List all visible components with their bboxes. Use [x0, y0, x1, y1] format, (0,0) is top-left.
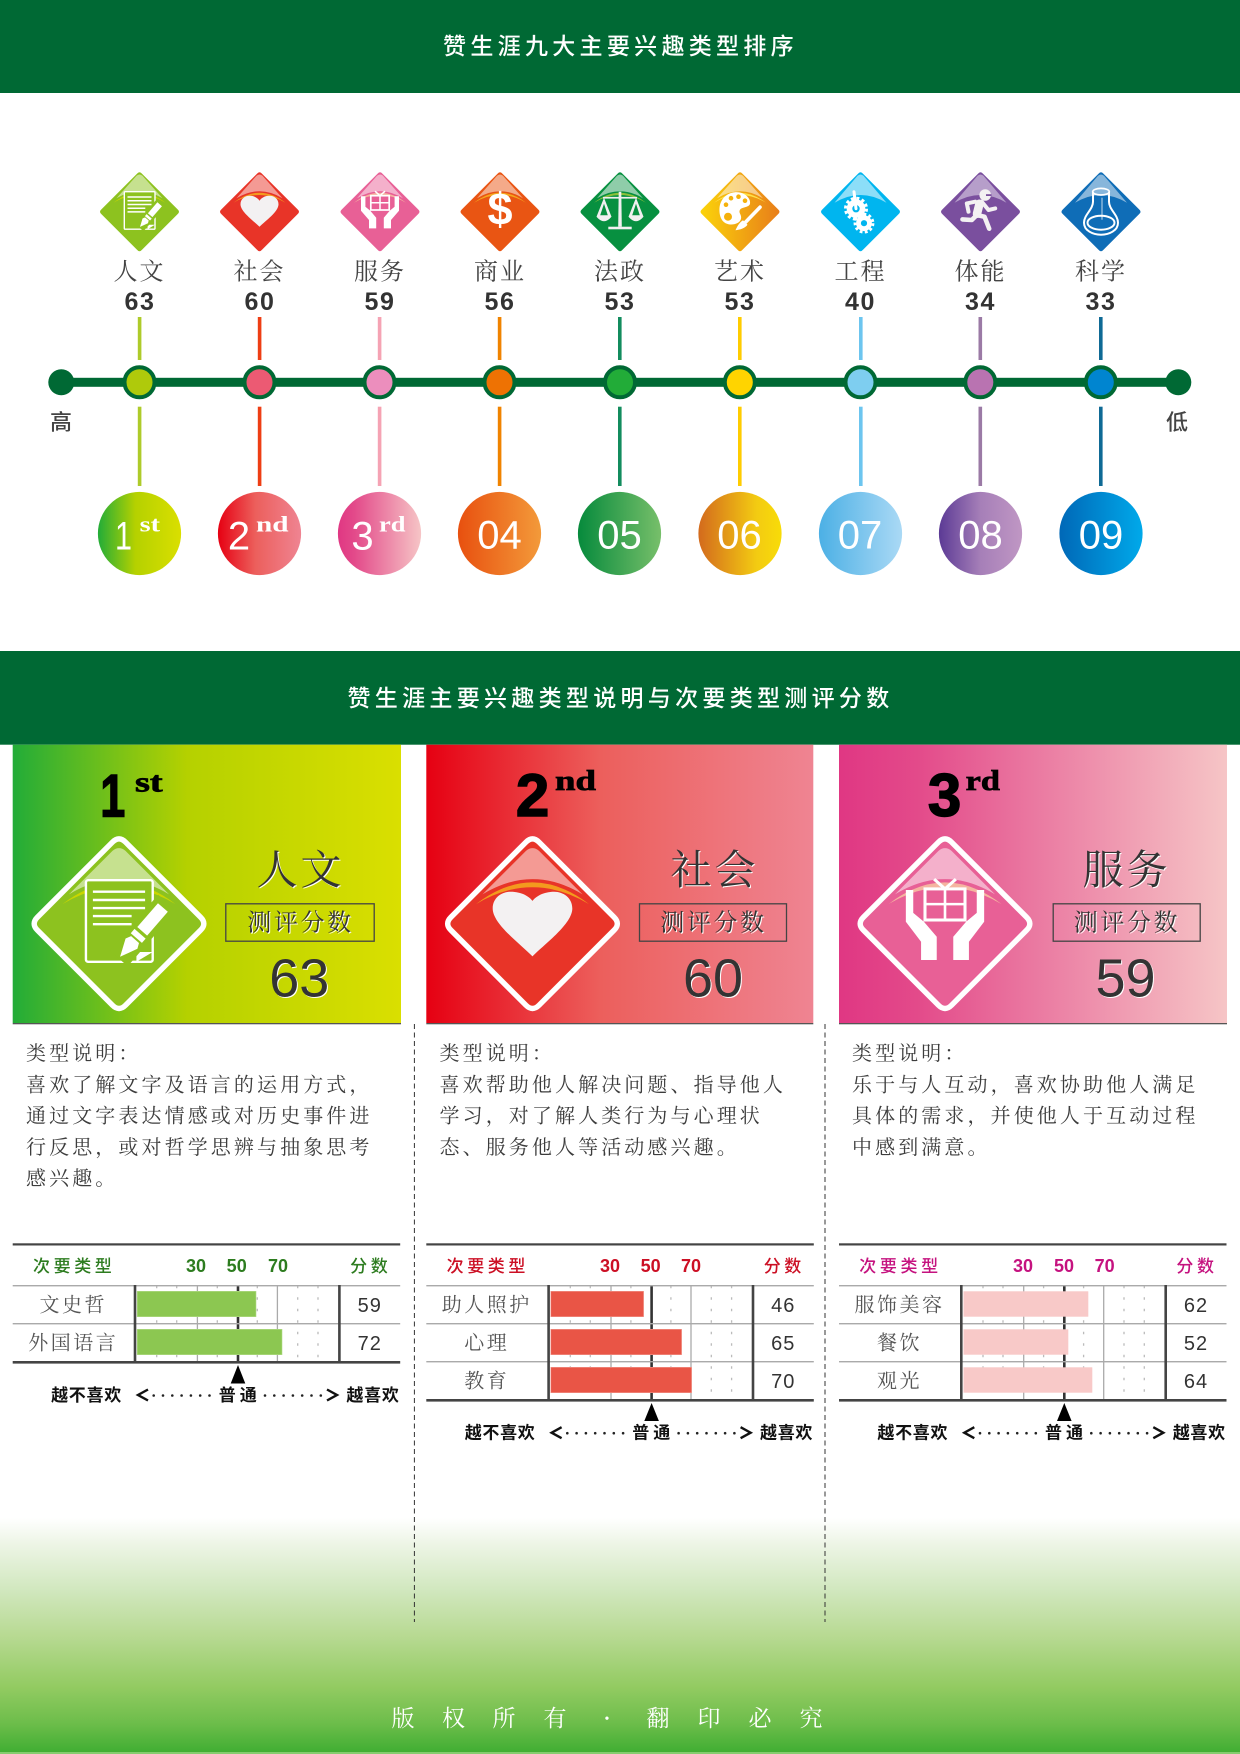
preference legend: 越不喜欢: [877, 1423, 948, 1443]
score label box: 测评分数: [660, 910, 767, 936]
rank number: 1: [100, 762, 125, 830]
card banner: [839, 745, 1227, 1024]
preference legend: [877, 1423, 1226, 1443]
type description: [26, 1042, 372, 1190]
score value: 60: [683, 948, 743, 1008]
connector lines: [738, 317, 742, 486]
type description: 学习，对了解人类行为与心理状: [440, 1105, 763, 1128]
bar: 外国语言 72: [28, 1329, 382, 1355]
rank badge: [458, 492, 541, 575]
footer gradient band: [0, 1518, 1240, 1754]
connector lines: [378, 317, 381, 486]
table header: 70: [1095, 1256, 1115, 1276]
category name: 工程: [834, 258, 886, 286]
type description: [852, 1042, 1198, 1159]
table header: [859, 1256, 1218, 1276]
footer copyright: 究: [800, 1706, 822, 1731]
icon: runner: [941, 172, 1020, 251]
secondary type chart: [426, 1243, 814, 1443]
type description: [440, 1042, 786, 1159]
timeline axis: [48, 369, 1191, 435]
timeline axis: 低: [1166, 410, 1188, 435]
table header: 分数: [1176, 1257, 1218, 1276]
bar: 外国语言 72: 外国语言: [28, 1332, 118, 1354]
rank number: [100, 762, 164, 830]
connector lines: [498, 317, 501, 486]
bar: 服饰美容 62: 服饰美容: [854, 1294, 944, 1316]
rank badge: 08: [958, 514, 1003, 558]
rank number: st: [135, 768, 164, 798]
score: 53: [604, 288, 636, 316]
icon: dollar: [460, 172, 540, 251]
footer copyright: 所: [492, 1706, 516, 1731]
icon: palette and brush: [700, 172, 780, 251]
secondary type chart: [13, 1243, 400, 1405]
table header: 次要类型: [447, 1257, 529, 1276]
score value: 59: [1095, 948, 1156, 1008]
marker triangle: [1057, 1403, 1072, 1421]
score: 33: [1085, 288, 1117, 316]
score label box: [1053, 904, 1200, 941]
icon: flask: [1062, 172, 1140, 251]
header bar: description: [0, 651, 1240, 745]
rank badge: [98, 492, 181, 575]
rank badge: [218, 492, 301, 575]
score: 53: [724, 288, 756, 316]
table header: 70: [681, 1256, 701, 1276]
preference legend: 越喜欢: [1173, 1423, 1226, 1443]
category name: 体能: [954, 258, 1006, 286]
column 2: 社会: [218, 172, 301, 575]
connector lines: [618, 317, 622, 486]
type name: 人文: [256, 847, 344, 893]
preference legend: 普通: [219, 1385, 261, 1405]
table header: 分数: [764, 1257, 805, 1276]
large icon: heart: [448, 839, 617, 1009]
icon: dollar: $: [487, 184, 513, 235]
icon: document and pen: [100, 172, 179, 251]
type description: 行反思，或对哲学思辨与抽象思考: [26, 1136, 372, 1159]
preference legend: 越喜欢: [760, 1423, 813, 1443]
column 9: 科学: [1059, 172, 1143, 575]
header bar: ranking: [0, 0, 1240, 93]
table header: 次要类型: [33, 1257, 115, 1276]
panel: rank 2 社会: [426, 745, 814, 1443]
card banner: [426, 745, 813, 1024]
bar: 文史哲 59: 文史哲: [39, 1294, 107, 1316]
panel: rank 1 人文: [13, 745, 401, 1405]
rank number: 3: [928, 762, 961, 829]
large icon: document and pen: [34, 839, 204, 1009]
rank number: nd: [555, 766, 597, 797]
column 1: 人文: [98, 172, 181, 575]
bar: 教育 70: [464, 1367, 795, 1393]
connector lines: [258, 317, 261, 486]
rank badge: 2: [228, 514, 250, 558]
score label box: 测评分数: [1074, 910, 1180, 936]
preference legend: 普通: [632, 1423, 674, 1443]
preference legend: [51, 1385, 400, 1405]
table header: 30: [186, 1256, 206, 1276]
rank badge: 07: [838, 514, 882, 558]
score: 60: [244, 288, 276, 316]
score label box: 测评分数: [247, 910, 354, 936]
rank badge: 3: [351, 514, 374, 558]
large icon: hands holding gift: [860, 839, 1030, 1009]
score: 56: [484, 288, 516, 316]
rank badge: [819, 492, 902, 575]
bar: 服饰美容 62: [854, 1291, 1208, 1317]
icon: scales: [580, 172, 660, 251]
type description: 乐于与人互动，喜欢协助他人满足: [852, 1073, 1198, 1096]
bar: 观光 64: 64: [1184, 1371, 1208, 1393]
category name: 服务: [354, 258, 406, 286]
score: 59: [364, 288, 396, 316]
bar: 心理 65: 心理: [464, 1332, 509, 1354]
rank badge: [698, 492, 782, 575]
rank badge: 04: [477, 514, 522, 558]
footer copyright: 有: [544, 1706, 566, 1731]
header bar: description: 赞生涯主要兴趣类型说明与次要类型测评分数: [348, 685, 894, 711]
category name: 社会: [234, 258, 286, 286]
connector lines: [978, 317, 982, 486]
type description: 通过文字表达情感或对历史事件进: [26, 1105, 372, 1128]
bar: 餐饮 52: 餐饮: [877, 1332, 922, 1354]
type description: 具体的需求，并使他人于互动过程: [852, 1105, 1198, 1128]
table header: [447, 1256, 805, 1276]
score: 63: [124, 288, 156, 316]
rank badge: 05: [597, 514, 642, 558]
icon: heart: [220, 172, 299, 251]
type description: 喜欢帮助他人解决问题、指导他人: [440, 1073, 786, 1096]
bar: 文史哲 59: 59: [358, 1295, 382, 1317]
type name: 服务: [1082, 847, 1170, 893]
dashed divider left: [413, 1024, 415, 1622]
timeline node: [484, 367, 514, 397]
rank badge: [578, 492, 661, 575]
bar: 教育 70: 教育: [464, 1370, 509, 1392]
bar: 助人照护 46: 46: [771, 1295, 795, 1317]
category name: 法政: [594, 258, 646, 286]
type description: 类型说明：: [26, 1042, 142, 1065]
preference legend: 越不喜欢: [51, 1385, 122, 1405]
category name: 科学: [1075, 258, 1127, 286]
column 5: 法政: [578, 172, 661, 575]
bar: 观光 64: 观光: [877, 1370, 922, 1392]
footer copyright: 印: [698, 1706, 720, 1731]
category name: 商业: [474, 258, 526, 286]
score label box: [226, 904, 374, 941]
timeline node: [364, 367, 394, 397]
score label box: [640, 904, 786, 941]
type description: 类型说明：: [440, 1042, 555, 1065]
preference legend: [465, 1423, 813, 1443]
score: 34: [965, 288, 996, 316]
rank number: [928, 762, 1001, 829]
type name: 社会: [670, 847, 758, 893]
timeline node: [965, 367, 995, 397]
table header: 次要类型: [859, 1257, 942, 1276]
table header: 50: [227, 1256, 247, 1276]
timeline node: [605, 367, 635, 397]
table header: 50: [641, 1256, 661, 1276]
bar: 服饰美容 62: 62: [1184, 1295, 1208, 1317]
rank badge: 09: [1079, 514, 1123, 558]
bar: 餐饮 52: [877, 1329, 1208, 1355]
rank badge: 06: [717, 514, 762, 558]
rank number: rd: [966, 766, 1001, 797]
timeline node: [725, 367, 755, 397]
bar: 教育 70: 70: [771, 1371, 795, 1393]
table header: 30: [600, 1256, 620, 1276]
type description: 感兴趣。: [26, 1167, 118, 1190]
rank badge: [338, 492, 421, 575]
card banner: [13, 745, 401, 1024]
bar: 外国语言 72: 72: [358, 1333, 382, 1355]
footer copyright: [392, 1706, 822, 1731]
type description: 中感到满意。: [852, 1136, 991, 1159]
rank badge: nd: [256, 512, 289, 536]
table header: 70: [268, 1256, 288, 1276]
dashed divider right: [824, 1024, 826, 1622]
footer copyright: 必: [748, 1706, 772, 1731]
column 8: 体能: [939, 172, 1022, 575]
bar: 观光 64: [877, 1367, 1208, 1393]
icon: hands holding gift: [340, 172, 420, 251]
preference legend: 普通: [1045, 1423, 1087, 1443]
bar: 文史哲 59: [39, 1291, 382, 1317]
header bar: ranking: 赞生涯九大主要兴趣类型排序: [443, 33, 798, 59]
column 6: 艺术: [698, 172, 782, 575]
column 4: 商业: [458, 172, 541, 575]
table header: 30: [1013, 1256, 1033, 1276]
bar: 助人照护 46: [442, 1291, 795, 1317]
type description: 态、服务他人等活动感兴趣。: [440, 1136, 740, 1159]
footer copyright: 权: [442, 1706, 465, 1731]
score: 40: [845, 288, 876, 316]
footer copyright: 版: [392, 1706, 414, 1731]
bar: 餐饮 52: 52: [1184, 1333, 1208, 1355]
marker triangle: [644, 1403, 659, 1421]
bar: 心理 65: 65: [771, 1333, 795, 1355]
preference legend: 越喜欢: [346, 1385, 400, 1405]
footer copyright: 翻: [646, 1706, 670, 1731]
table header: 分数: [350, 1257, 391, 1276]
bar: 心理 65: [464, 1329, 795, 1355]
preference legend: 越不喜欢: [465, 1423, 536, 1443]
secondary type chart: [839, 1243, 1226, 1443]
category name: 艺术: [714, 258, 766, 286]
timeline node: [1086, 367, 1116, 397]
timeline node: [244, 367, 274, 397]
rank badge: st: [140, 512, 161, 536]
type description: 喜欢了解文字及语言的运用方式，: [26, 1073, 372, 1096]
rank badge: rd: [379, 512, 406, 536]
rank number: [516, 762, 597, 829]
column 3: 服务: [338, 172, 421, 575]
bar: 助人照护 46: 助人照护: [442, 1294, 532, 1316]
rank badge: [1059, 492, 1143, 575]
connector lines: [859, 317, 863, 486]
timeline node: [846, 367, 876, 397]
category name: 人文: [114, 258, 166, 286]
panel: rank 3 服务: [839, 745, 1227, 1443]
timeline node: [124, 367, 154, 397]
icon: gears: [821, 172, 900, 251]
timeline axis: 高: [50, 410, 72, 435]
rank badge: [939, 492, 1022, 575]
marker triangle: [231, 1365, 245, 1384]
table header: 50: [1054, 1256, 1074, 1276]
type description: 类型说明：: [852, 1042, 968, 1065]
table header: [33, 1256, 391, 1276]
connector lines: [1099, 317, 1103, 486]
score value: 63: [269, 948, 329, 1008]
column 7: 工程: [819, 172, 902, 575]
rank number: 2: [516, 762, 549, 829]
connector lines: [138, 317, 141, 486]
footer copyright: •: [605, 1712, 610, 1727]
rank badge: 1: [115, 514, 132, 558]
